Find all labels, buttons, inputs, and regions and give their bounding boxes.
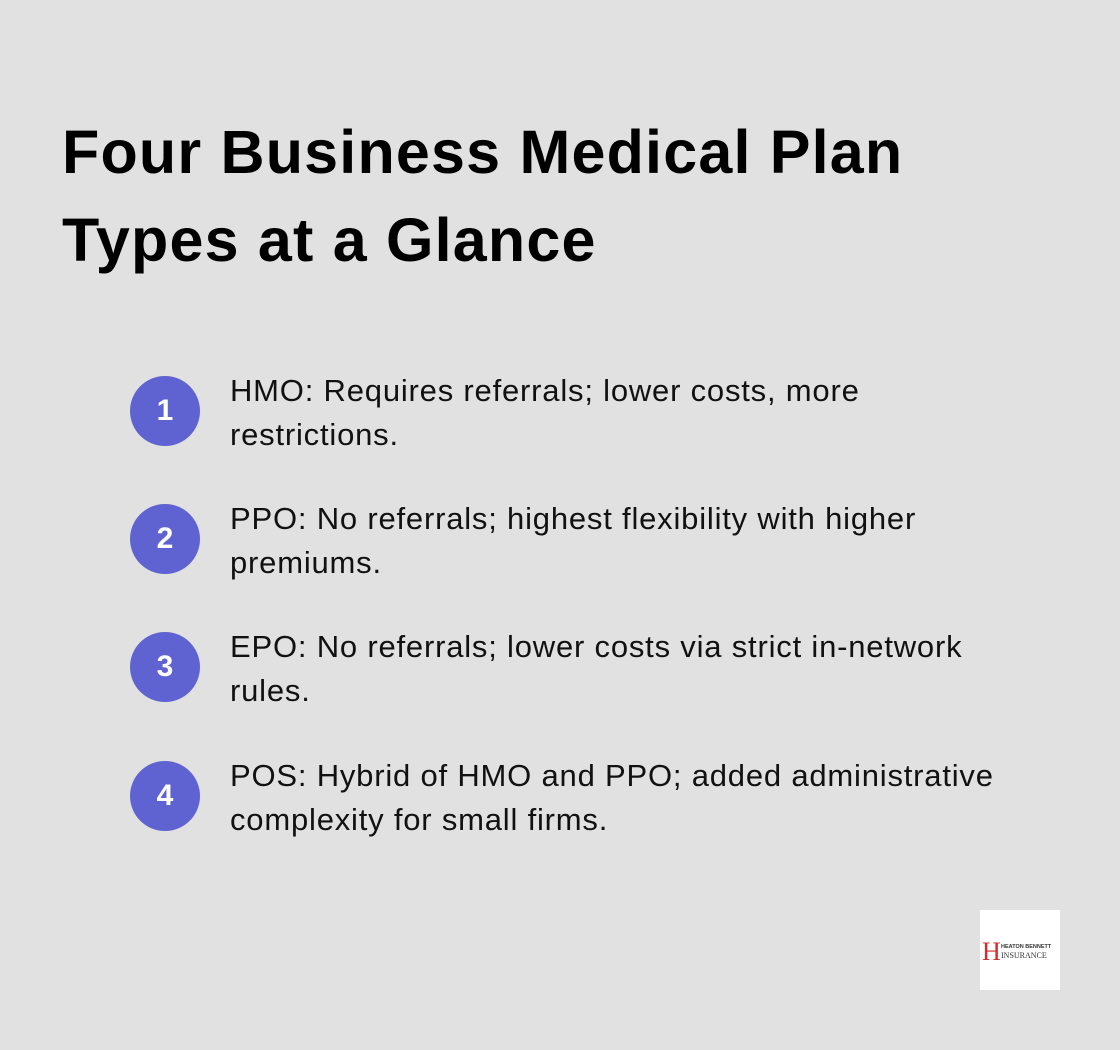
text 1: HMO: Requires referrals; lower costs, more	[230, 373, 860, 408]
text 1: restrictions.	[230, 417, 399, 452]
icon: number 4	[130, 761, 200, 831]
icon: number 1: 1	[157, 394, 173, 427]
icon: number 3: 3	[157, 650, 173, 683]
icon: number 2: 2	[157, 522, 173, 555]
icon: number 2	[130, 504, 200, 574]
logo: INSURANCE	[1001, 951, 1047, 960]
text 3: rules.	[230, 673, 311, 708]
text 2: PPO: No referrals; highest flexibility with higher	[230, 501, 916, 536]
text 2	[230, 501, 916, 580]
text 3: EPO: No referrals; lower costs via strict in-network	[230, 629, 962, 664]
item 1	[130, 373, 860, 452]
text 3	[230, 629, 962, 708]
text 2: premiums.	[230, 545, 382, 580]
logo: H	[982, 937, 1001, 966]
item 2	[130, 501, 916, 580]
title: Four Business Medical Plan	[62, 118, 903, 186]
title	[62, 118, 903, 274]
title: Types at a Glance	[62, 206, 597, 274]
item 3	[130, 629, 962, 708]
text 4	[230, 758, 994, 837]
icon: number 4: 4	[157, 779, 173, 812]
logo	[980, 910, 1060, 990]
icon: number 1	[130, 376, 200, 446]
text 4: POS: Hybrid of HMO and PPO; added administrative	[230, 758, 994, 793]
icon: number 3	[130, 632, 200, 702]
logo: HEATON BENNETT	[1001, 944, 1052, 950]
text 1	[230, 373, 860, 452]
item 4	[130, 758, 994, 837]
text 4: complexity for small firms.	[230, 802, 608, 837]
